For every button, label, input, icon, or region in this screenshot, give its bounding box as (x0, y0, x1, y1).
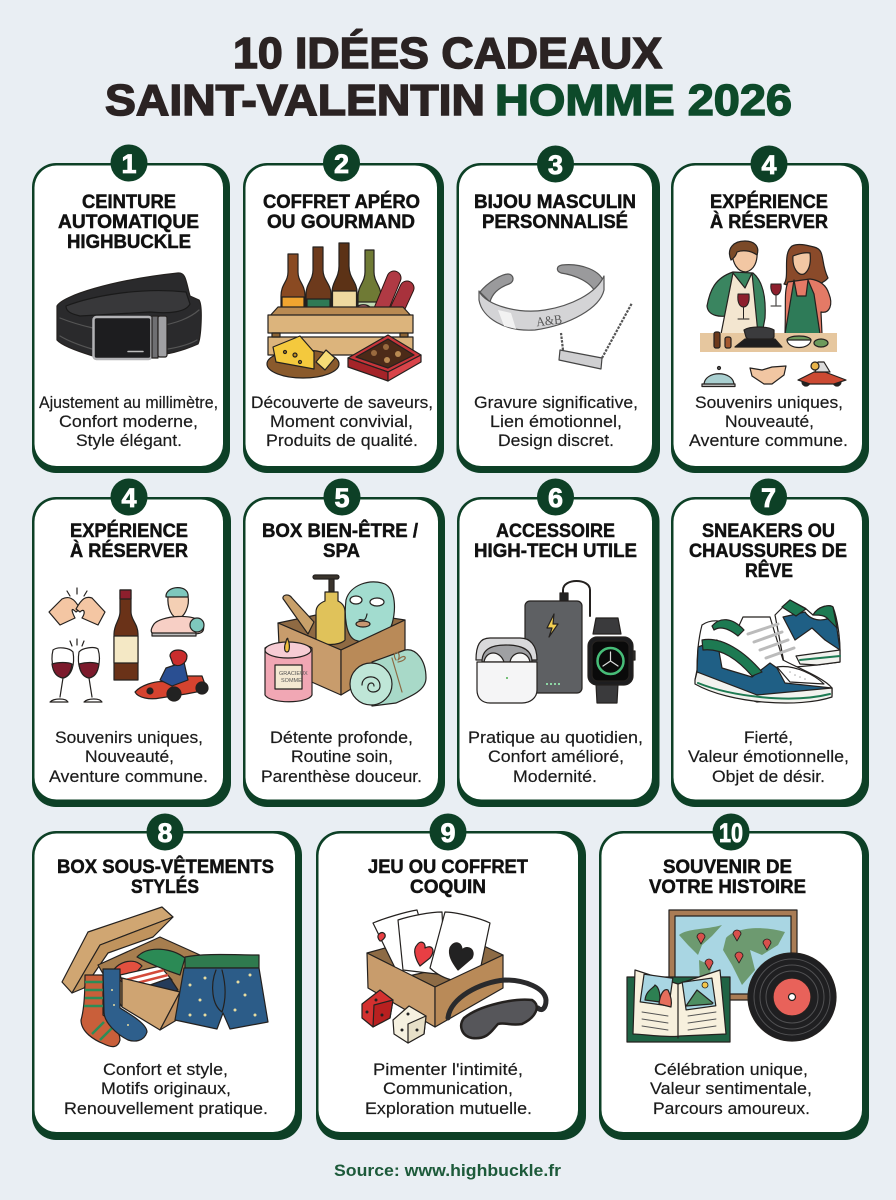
panel: card 3 jewel (456, 146, 660, 473)
text: benefits: Modernité. (513, 768, 597, 786)
title: 10 IDÉES CADEAUX (233, 28, 662, 78)
panel: card 10 memories (599, 814, 869, 1140)
heading: BOX BIEN-ÊTRE / (262, 518, 419, 542)
text: benefits: Valeur émotionnelle, (688, 748, 849, 766)
heading: OU GOURMAND (267, 211, 415, 233)
heading: BIJOU MASCULIN (474, 191, 636, 213)
text: benefits (251, 394, 433, 450)
text: benefits: Découverte de saveurs, (251, 394, 433, 412)
icon: spa box: SOMME (281, 678, 302, 684)
text: benefits: Ajustement au millimètre, (39, 394, 218, 412)
heading (58, 191, 199, 253)
text: benefits (689, 394, 848, 450)
icon: tech accessories (476, 581, 635, 703)
heading (262, 518, 419, 562)
text: benefits: Style élégant. (76, 432, 182, 450)
heading: JEU OU COFFRET (368, 856, 528, 878)
text: benefits: Exploration mutuelle. (365, 1100, 532, 1118)
badge 8 (146, 814, 184, 850)
text: benefits (39, 394, 218, 450)
text: benefits (650, 1061, 812, 1118)
heading: ACCESSOIRE (496, 520, 615, 542)
text: benefits: Confort et style, (103, 1061, 228, 1079)
panel: card 2 apéro (243, 144, 444, 473)
icon: underwear box (62, 907, 268, 1047)
icon: bracelet and necklace (479, 265, 632, 369)
heading: CHAUSSURES DE (689, 540, 847, 562)
badge 4: 4 (761, 150, 777, 180)
heading: AUTOMATIQUE (58, 211, 199, 233)
heading (474, 520, 637, 562)
icon: spa box: GRACIEUX (279, 671, 308, 677)
text: benefits (64, 1061, 268, 1118)
text: benefits: Aventure commune. (49, 768, 208, 786)
title: SAINT-VALENTIN (105, 76, 485, 125)
icon: cards and mask (362, 910, 546, 1043)
badge 3: 3 (548, 150, 563, 180)
heading: VOTRE HISTOIRE (649, 876, 806, 898)
icon: map album vinyl (627, 910, 836, 1042)
badge 5: 5 (334, 483, 350, 513)
badge 3 (537, 146, 574, 182)
text: benefits (261, 729, 422, 786)
text: benefits: Confort amélioré, (488, 748, 624, 766)
icon: bracelet and necklace: A&B (535, 311, 563, 329)
heading: HIGHBUCKLE (67, 231, 191, 253)
text: benefits (365, 1061, 532, 1118)
heading: EXPÉRIENCE (710, 190, 828, 213)
badge 5 (324, 478, 360, 516)
text: benefits: Pratique au quotidien, (468, 729, 643, 747)
heading (263, 190, 420, 233)
badge 7 (750, 478, 787, 516)
badge 2: 2 (334, 149, 349, 179)
heading (649, 856, 806, 898)
badge 10: 10 (719, 818, 743, 848)
icon: spa box (265, 575, 426, 706)
badge 2 (323, 144, 360, 182)
badge 1: 1 (121, 149, 137, 179)
heading: SPA (323, 540, 360, 562)
source: Source: www.highbuckle.fr (334, 1161, 561, 1180)
text: benefits: Pimenter l'intimité, (373, 1061, 523, 1079)
text: benefits: Design discret. (498, 432, 614, 450)
icon: sneakers (695, 600, 840, 703)
text: benefits: Renouvellement pratique. (64, 1100, 268, 1118)
text: benefits (688, 729, 849, 786)
panel: card 7 sneakers (671, 478, 869, 807)
icon: belt (57, 273, 201, 359)
title: HOMME 2026 (495, 76, 792, 125)
panel: card 1 belt (32, 144, 230, 473)
badge 1 (110, 144, 148, 182)
text: benefits: Produits de qualité. (266, 432, 418, 450)
text: benefits: Gravure significative, (474, 394, 638, 412)
text: benefits: Confort moderne, (59, 413, 198, 431)
text: benefits: Objet de désir. (712, 768, 825, 786)
icon: couple cooking (700, 241, 846, 386)
badge 9: 9 (440, 818, 456, 848)
heading: PERSONNALISÉ (482, 210, 628, 233)
heading: SOUVENIR DE (663, 856, 792, 878)
text: benefits: Fierté, (744, 729, 793, 747)
text: benefits: Motifs originaux, (101, 1080, 231, 1098)
text: benefits: Souvenirs uniques, (55, 729, 203, 747)
text: benefits: Nouveauté, (725, 413, 814, 431)
heading: CEINTURE (82, 191, 176, 213)
badge 8: 8 (157, 818, 173, 848)
icon: experience collage (49, 588, 208, 702)
panel: card 5 spa (243, 478, 445, 807)
text: benefits (49, 729, 208, 786)
text: benefits: Aventure commune. (689, 432, 848, 450)
text: benefits: Valeur sentimentale, (650, 1080, 812, 1098)
title (105, 28, 792, 125)
heading (57, 854, 274, 898)
heading: BOX SOUS-VÊTEMENTS (57, 854, 274, 878)
text: benefits (474, 394, 638, 450)
heading: COQUIN (410, 876, 486, 898)
panel: card 6 tech (457, 478, 660, 807)
heading: SNEAKERS OU (702, 520, 835, 542)
heading: À RÉSERVER (70, 539, 188, 562)
panel: card 4 bis experience (32, 478, 231, 807)
text: benefits: Parcours amoureux. (653, 1100, 810, 1118)
badge 4 (750, 146, 788, 182)
text: benefits: Communication, (383, 1080, 513, 1098)
panel: card 4 experience cooking (671, 146, 869, 473)
badge 9 (430, 814, 466, 850)
badge 4 bis (110, 478, 148, 516)
heading (70, 519, 188, 562)
text: benefits: Célébration unique, (654, 1061, 808, 1079)
heading: HIGH-TECH UTILE (474, 540, 637, 562)
heading: STYLÉS (131, 875, 199, 898)
panel: card 8 underwear (32, 814, 302, 1140)
heading: EXPÉRIENCE (70, 519, 188, 542)
heading: À RÉSERVER (710, 210, 828, 233)
heading (710, 190, 828, 233)
icon: aperitif crate (267, 243, 421, 381)
text: benefits: Parenthèse douceur. (261, 768, 422, 786)
text: benefits: Nouveauté, (85, 748, 174, 766)
text: benefits: Détente profonde, (270, 729, 413, 747)
heading (368, 856, 528, 898)
text: benefits: Routine soin, (291, 748, 393, 766)
badge 4 bis: 4 (121, 483, 137, 513)
heading (474, 191, 636, 233)
heading: COFFRET APÉRO (263, 190, 420, 213)
heading: RÊVE (745, 558, 793, 582)
badge 6 (537, 478, 574, 516)
panel: card 9 game (316, 814, 586, 1140)
text: benefits: Moment convivial, (270, 413, 413, 431)
text: benefits (468, 729, 643, 786)
heading (689, 520, 847, 582)
badge 6: 6 (548, 483, 563, 513)
text: benefits: Lien émotionnel, (490, 413, 622, 431)
badge 7: 7 (761, 483, 776, 513)
badge 10 (712, 814, 750, 850)
text: benefits: Souvenirs uniques, (695, 394, 843, 412)
